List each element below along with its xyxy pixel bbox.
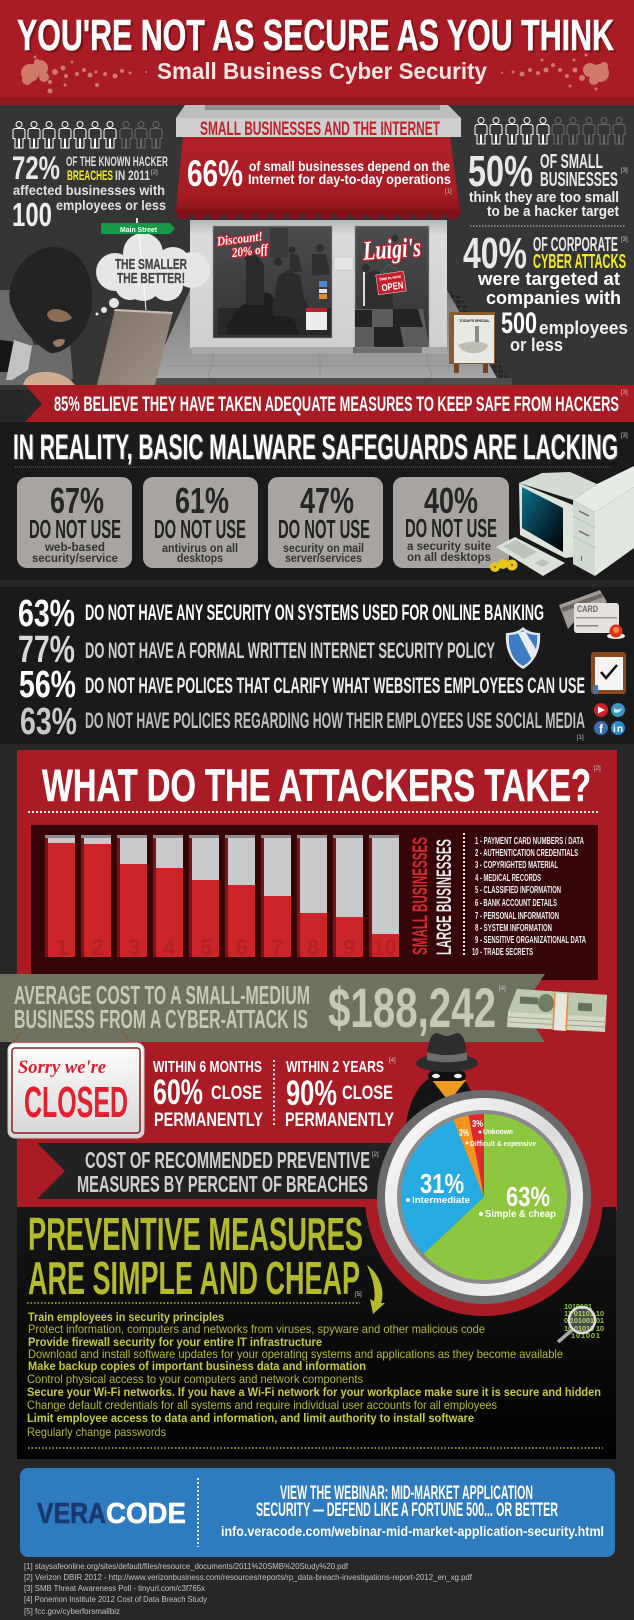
stat: within 6 months <box>153 1059 263 1131</box>
open sign: OPEN <box>381 280 404 294</box>
safeguard card: 40%: a security suite <box>407 539 491 553</box>
footnotes: [1] staysafeonline.org/sites/default/files/resource_documents/2011%20SMB%20Study%20.pdf <box>24 1561 349 1571</box>
stat: within 2 years: PERMANENTLY <box>285 1110 394 1131</box>
menu board <box>449 312 495 373</box>
right stat: 50% and 40%: employees <box>539 318 628 338</box>
category list: 3 - COPYRIGHTED MATERIAL <box>475 860 558 871</box>
footnotes: [4] Ponemon Institute 2012 Cost of Data Breach Study <box>24 1594 208 1604</box>
veracode logo <box>37 1498 186 1530</box>
menu board: TODAY'S SPECIAL <box>459 318 491 323</box>
thought bubble: THE SMALLER <box>115 256 187 273</box>
panel: preventive measures background <box>17 1078 616 1459</box>
sign: sorry we're closed: Sorry we're <box>18 1057 107 1078</box>
preventive measures list: Train employees in security principles <box>28 1310 224 1324</box>
safeguard card: 47%: DO NOT USE <box>278 514 370 544</box>
banner: cost of preventive measures: [2] <box>372 1152 379 1158</box>
footnotes: [5] fcc.gov/cyberforsmallbiz <box>24 1606 120 1616</box>
right stat: 50% and 40%: 40% <box>463 229 527 278</box>
safeguard card: 67%: 67% <box>50 480 104 521</box>
bar 3: 3 <box>128 935 140 960</box>
door <box>355 226 429 347</box>
pie labels: 3% <box>459 1128 469 1139</box>
preventive measures list: Regularly change passwords <box>27 1425 166 1439</box>
safeguard card: 61%: 61% <box>175 480 229 521</box>
people icons <box>13 122 162 148</box>
shop window <box>213 226 332 338</box>
icon: social media buttons: in <box>613 724 623 735</box>
heading: basic malware safeguards: [3] <box>621 433 628 439</box>
safeguard card: 47%: server/services <box>285 551 362 565</box>
pie labels <box>406 1119 556 1220</box>
preventive measures list: Control physical access to your computers and network components <box>27 1372 363 1386</box>
roof <box>176 105 461 118</box>
icon: clipboard <box>591 652 626 694</box>
icon: social media buttons: f <box>599 722 604 736</box>
sign: sorry we're closed <box>8 1032 144 1138</box>
bar 4 <box>153 835 183 960</box>
banner: cost of preventive measures <box>37 1143 400 1199</box>
safeguard card: 61% <box>143 477 258 568</box>
ink splatter left <box>21 56 147 94</box>
call to action panel: info.veracode.com/webinar-mid-market-application-security.html <box>221 1524 604 1539</box>
heading: preventive measures <box>27 1208 363 1304</box>
bar 7 <box>261 835 291 960</box>
66% stat: of small businesses depend on the <box>249 159 450 174</box>
building walls <box>190 220 447 348</box>
bar 6: 6 <box>236 935 248 960</box>
safeguard card: 40%: on all desktops <box>407 550 491 564</box>
bar 5 <box>189 835 219 960</box>
bar 1: 1 <box>56 935 68 960</box>
slice: intermediate 31% <box>401 1120 484 1254</box>
icon: binary magnifier: 1010101 <box>564 1302 592 1311</box>
slice: unknown 3% <box>468 1114 484 1197</box>
66% stat: [1] <box>445 189 452 195</box>
banner: average cost: $188,242 <box>328 976 496 1039</box>
safeguard card: 67%: security/service <box>32 551 118 565</box>
footnotes: [3] SMB Threat Awareness Poll - tinyurl.com/c3f765x <box>24 1583 206 1593</box>
safeguard card: 67%: DO NOT USE <box>29 514 121 544</box>
bar 10 <box>369 835 399 960</box>
preventive measures list: Make backup copies of important business data and information <box>28 1359 366 1373</box>
tower <box>573 500 595 576</box>
heading: preventive measures: PREVENTIVE MEASURES <box>28 1208 363 1260</box>
icon: binary magnifier <box>558 1302 604 1342</box>
category list: 6 - BANK ACCOUNT DETAILS <box>475 898 557 909</box>
banner: 85% believe <box>25 385 634 422</box>
banner: average cost: [4] <box>499 986 506 992</box>
row: social media <box>20 701 585 743</box>
left stat: 72% of breaches: employees or less <box>56 197 166 213</box>
pie chart: cost by percent of breaches <box>377 1090 591 1304</box>
luigi's lettering: Luigi's <box>361 232 422 266</box>
stat: within 6 months: WITHIN 6 MONTHS <box>153 1059 262 1076</box>
stat: within 2 years: 90% <box>286 1074 337 1113</box>
safeguard card: 47% <box>268 477 383 568</box>
panel: what do the attackers take: [2] <box>594 766 601 772</box>
banner: average cost: AVERAGE COST TO A SMALL-MEDIUM <box>14 980 310 1010</box>
gold discs <box>490 559 518 572</box>
66% stat: 66% <box>187 153 243 194</box>
row: social media: [1] <box>577 735 584 741</box>
icon: binary magnifier: 0 101001 01 <box>564 1316 604 1325</box>
bar 4: 4 <box>163 935 176 960</box>
safeguard card: 61%: DO NOT USE <box>154 514 246 544</box>
sign heading: SMALL BUSINESSES AND THE INTERNET <box>200 119 440 140</box>
icon: stack of money <box>507 989 607 1032</box>
right stat: 50% and 40%: or less <box>510 335 563 355</box>
icon: credit cards <box>559 590 625 639</box>
category list: 7 - PERSONAL INFORMATION <box>475 911 559 922</box>
category list: 5 - CLASSIFIED INFORMATION <box>475 885 561 896</box>
awning <box>176 137 460 210</box>
shop window: 20% off <box>230 241 270 260</box>
row: written policy: 77% <box>18 629 75 671</box>
laptop <box>97 309 173 385</box>
policy list <box>18 593 585 743</box>
right stat: 50% and 40%: 50% <box>468 147 533 196</box>
veracode logo: CODE <box>106 1498 186 1530</box>
row: written policy <box>18 629 495 671</box>
bar 2 <box>81 835 111 960</box>
stat: within 6 months: PERMANENTLY <box>154 1110 263 1131</box>
pie labels: Unknown <box>483 1129 513 1136</box>
open sign <box>374 262 406 295</box>
preventive measures list: Provide firewall security for your entire IT infrastructure <box>28 1335 322 1349</box>
left stat: 72% of breaches: OF THE KNOWN HACKER <box>66 153 168 169</box>
right stat: 50% and 40%: were targeted at <box>477 268 620 289</box>
veracode logo: VERA <box>37 1498 106 1530</box>
panel: what do the attackers take <box>17 750 617 1210</box>
banner: average cost: BUSINESS FROM A CYBER-ATTACK IS <box>14 1004 308 1034</box>
safeguard card: 40% <box>393 477 509 568</box>
suit <box>0 290 73 385</box>
sign: sorry we're closed: CLOSED <box>24 1078 128 1127</box>
icon: computer <box>490 466 634 576</box>
right stat: 50% and 40%: 500 <box>501 307 537 340</box>
stat: within 2 years: [4] <box>389 1058 396 1064</box>
bar 1 <box>45 835 75 960</box>
left stat: 72% of breaches: 100 <box>12 196 52 233</box>
icon: binary magnifier: 10 01010 10 <box>564 1324 604 1333</box>
right stat: 50% and 40%: to be a hacker target <box>487 203 619 220</box>
partner plate <box>334 257 353 270</box>
bar 3 <box>117 835 147 960</box>
pie labels: 31% <box>420 1168 464 1199</box>
sidewalk <box>150 290 502 378</box>
bar chart <box>31 825 598 980</box>
header band <box>0 0 634 105</box>
right stat: 50% and 40%: [3] <box>621 168 628 174</box>
category list: 10 - TRADE SECRETS <box>472 947 533 958</box>
category list: 8 - SYSTEM INFORMATION <box>475 923 552 934</box>
right stat: 50% and 40% <box>463 118 628 355</box>
category list <box>472 836 586 958</box>
keyboard <box>496 537 565 576</box>
left stat: 72% of breaches: IN 2011 <box>115 167 150 183</box>
preventive measures list: Limit employee access to data and information, and limit authority to install software <box>27 1411 474 1425</box>
pie labels: Intermediate <box>412 1195 470 1206</box>
sign band <box>176 118 461 137</box>
pie labels: 63% <box>506 1181 550 1212</box>
pie labels: Simple & cheap <box>485 1209 556 1220</box>
66% stat: Internet for day-to-day operations <box>248 172 451 187</box>
banner: 85% believe: [3] <box>621 390 628 396</box>
icon: curved arrow <box>367 1265 385 1314</box>
icon: shield <box>506 627 540 669</box>
row: websites: 56% <box>19 664 76 706</box>
66% stat <box>187 153 452 195</box>
icon: credit cards: CARD <box>577 604 598 614</box>
stat: within 6 months: CLOSE <box>211 1083 262 1104</box>
left stat: 72% of breaches: BREACHES <box>67 167 113 183</box>
balaclava <box>9 247 92 353</box>
banner: average cost <box>0 974 545 1042</box>
bar 5: 5 <box>200 935 212 960</box>
bar 8: 8 <box>307 935 319 960</box>
heading: preventive measures: [5] <box>355 1292 362 1298</box>
bar 8 <box>297 835 327 960</box>
right stat: 50% and 40%: think they are too small <box>469 189 619 206</box>
stat: within 6 months: 60% <box>153 1073 203 1112</box>
left stat: 72% of breaches: [2] <box>151 170 158 176</box>
stat: within 2 years: CLOSE <box>342 1083 393 1104</box>
spy character <box>406 1033 478 1125</box>
monitor back <box>519 472 597 500</box>
slice: simple and cheap 63% <box>424 1114 567 1280</box>
heading: preventive measures: ARE SIMPLE AND CHEAP <box>28 1252 360 1304</box>
row: online banking <box>18 593 544 635</box>
pie labels: 3% <box>472 1119 483 1130</box>
icon: binary magnifier: 101001 <box>571 1331 600 1340</box>
hacker in balaclava with laptop <box>0 247 173 385</box>
preventive measures list: Protect information, computers and networks from viruses, spyware and other malicious code <box>28 1322 485 1336</box>
safeguard card: 67%: web-based <box>44 540 105 554</box>
bar 6 <box>225 835 255 960</box>
bar 9: 9 <box>343 935 355 960</box>
storefront illustration <box>150 105 512 385</box>
preventive measures list: Change default credentials for all systems and require individual user accounts for all employees <box>27 1398 497 1412</box>
safeguard card: 61%: desktops <box>177 551 223 565</box>
ink splatter right <box>501 54 609 90</box>
pie labels: Difficult & expensive <box>470 1141 536 1148</box>
legend key: small businesses: SMALL BUSINESSES <box>409 837 432 955</box>
row: social media: 63% <box>20 701 77 743</box>
floor <box>218 308 331 335</box>
bar 2: 2 <box>92 935 104 960</box>
left stat: 72% of breaches: 72% <box>12 150 60 186</box>
icon: binary magnifier: 11 01101 10 <box>564 1309 604 1318</box>
preventive measures list: Download and install software updates for your operating systems and applications as they become available <box>28 1347 563 1361</box>
notice poster <box>306 308 327 330</box>
footnotes: [2] Verizon DBIR 2012 - http://www.verizonbusiness.com/resources/reports/rp_data-breach-investigations-report-2012_en_xg.pdf <box>24 1572 473 1582</box>
row: websites <box>19 664 585 706</box>
icon: social media buttons <box>594 703 625 736</box>
monitor front <box>519 483 573 558</box>
safeguard card: 47%: 47% <box>300 480 354 521</box>
safeguard card: 40%: DO NOT USE <box>405 513 497 543</box>
street sign <box>101 218 175 234</box>
right stat: 50% and 40%: companies with <box>486 287 621 308</box>
legend key: large businesses: LARGE BUSINESSES <box>433 839 456 955</box>
slice: difficult and expensive 3% <box>454 1116 484 1197</box>
bar 9 <box>333 835 363 960</box>
stat: within 2 years: WITHIN 2 YEARS <box>286 1059 384 1076</box>
safeguard card: 67% <box>17 477 132 568</box>
left stat: 72% of breaches <box>12 122 168 233</box>
preventive measures list <box>27 1310 603 1448</box>
right stat: 50% and 40%: [3] <box>621 237 628 243</box>
safeguard card: 40%: 40% <box>424 480 478 521</box>
bar 10: 10 <box>373 935 396 960</box>
street sign: Main Street <box>120 225 157 234</box>
stat: within 2 years <box>285 1058 396 1131</box>
thought bubble <box>96 233 210 316</box>
subtitle: Small Business Cyber Security <box>157 58 487 84</box>
people icons <box>475 118 625 144</box>
row: online banking: 63% <box>18 593 75 635</box>
category list: 4 - MEDICAL RECORDS <box>475 873 541 884</box>
discount text: Discount! <box>215 228 264 249</box>
footnotes <box>24 1561 473 1616</box>
call to action panel <box>20 1468 615 1557</box>
banner: cost of preventive measures: COST OF RECOMMENDED PREVENTIVE <box>85 1147 370 1173</box>
banner: cost of preventive measures: MEASURES BY PERCENT OF BREACHES <box>77 1171 368 1197</box>
safeguard card: 47%: security on mail <box>283 541 364 555</box>
thought bubble: THE BETTER! <box>117 270 185 287</box>
safeguard card: 61%: antivirus on all <box>162 541 238 555</box>
open sign: Stop in, we're <box>379 273 402 282</box>
bar 7: 7 <box>271 935 283 960</box>
left stat: 72% of breaches: affected businesses with <box>13 182 165 198</box>
